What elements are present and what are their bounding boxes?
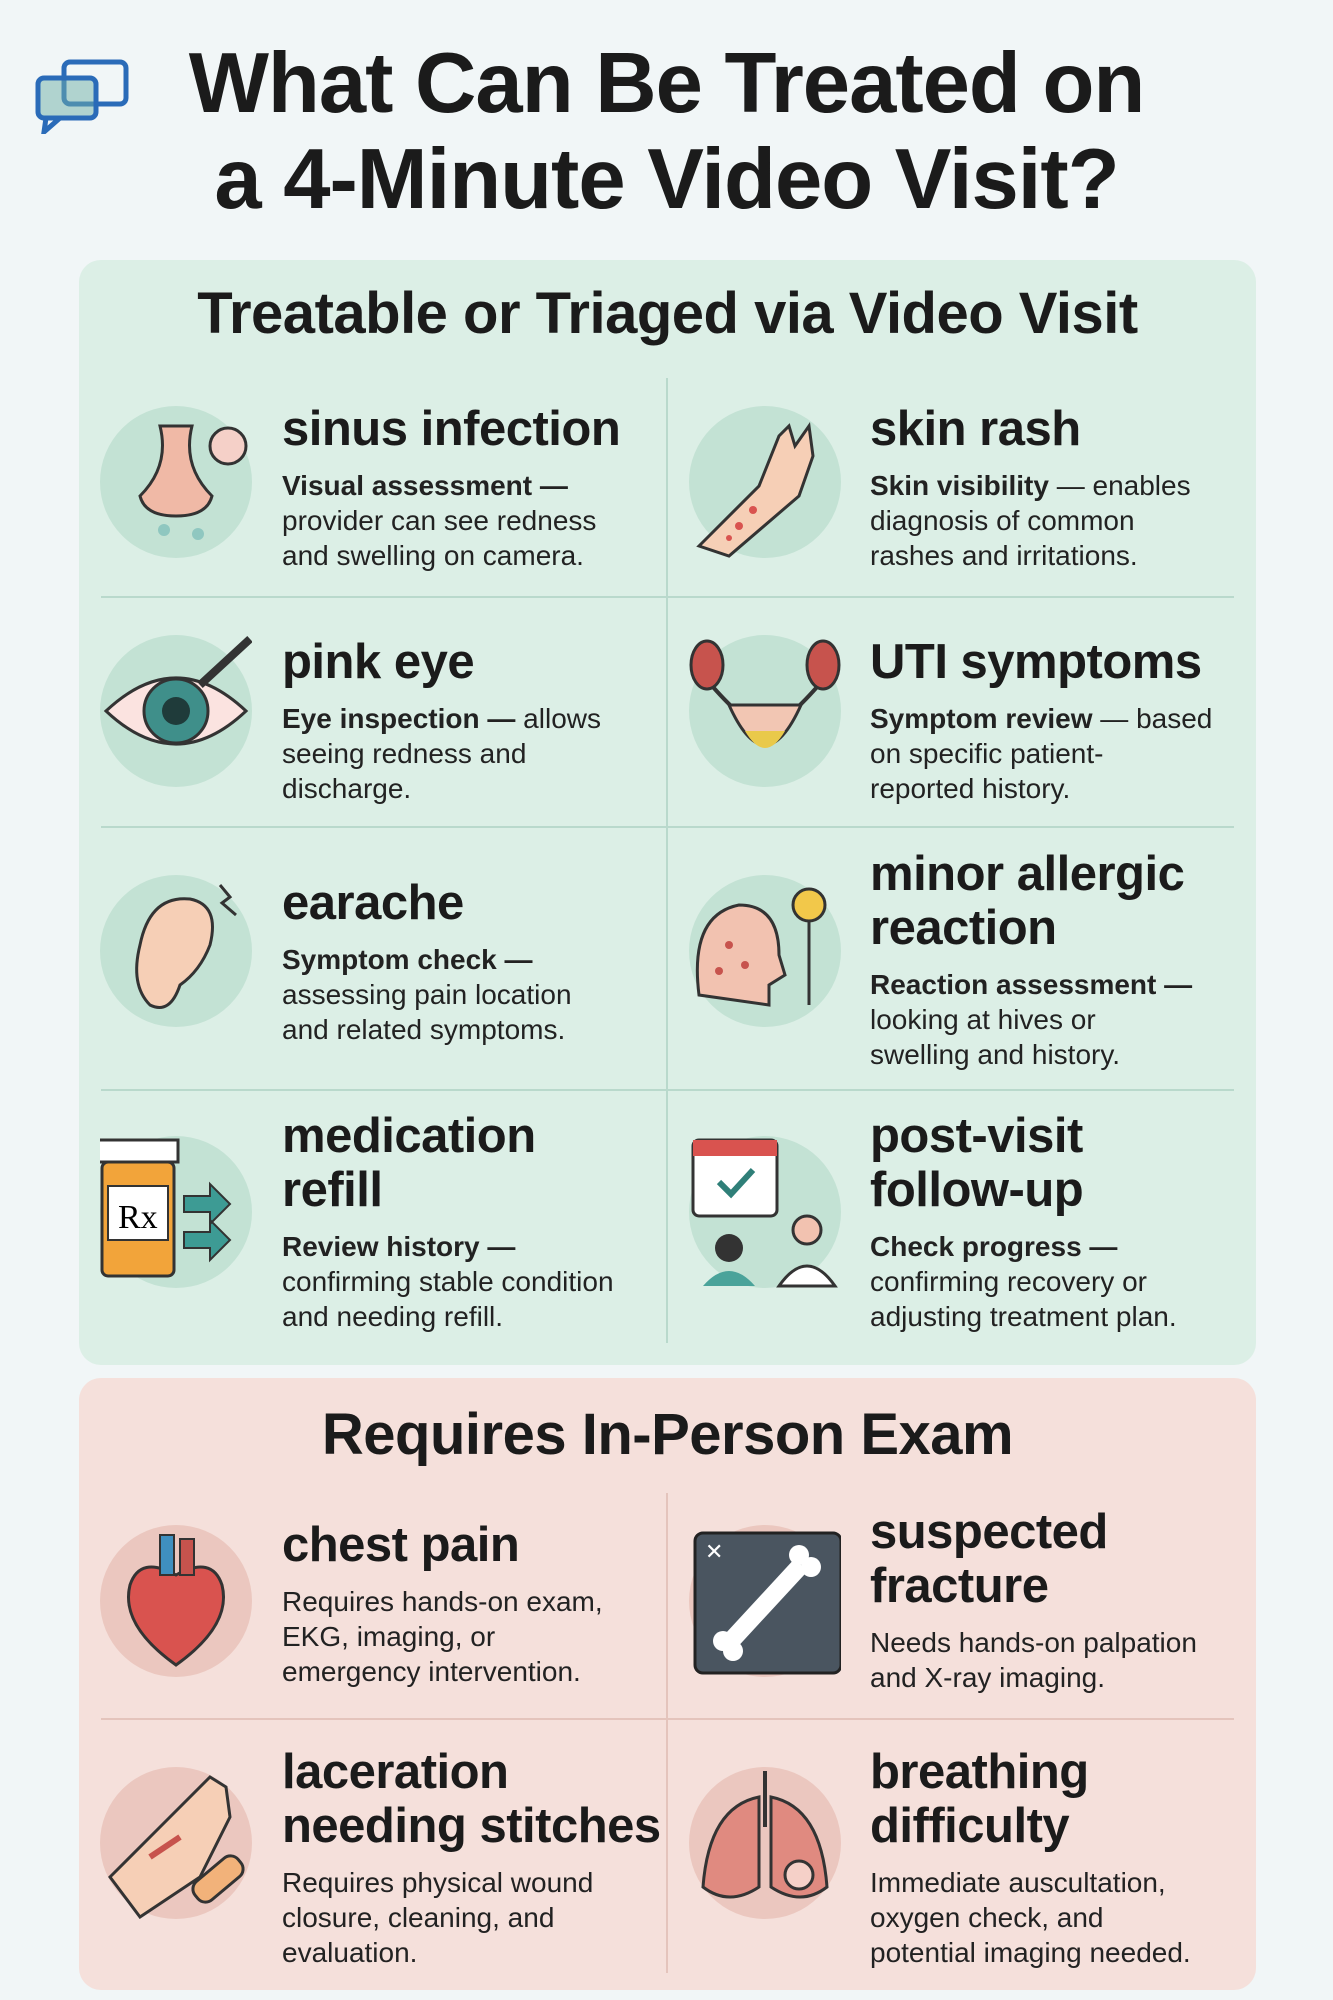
cell: sinus infection: sinus infection xyxy=(282,402,620,456)
cell: medication refill xyxy=(282,1109,614,1332)
cell: UTI symptoms: UTI symptoms xyxy=(870,635,1202,689)
icon: fracture xyxy=(689,1525,841,1677)
cell: pink eye: seeing redness and xyxy=(282,738,526,769)
cell: earache: and related symptoms. xyxy=(282,1014,565,1045)
icon: allergic reaction xyxy=(689,875,841,1027)
heading: in-person: Requires In-Person Exam xyxy=(322,1402,1013,1467)
cell: UTI symptoms: reported history. xyxy=(870,773,1070,804)
cell: earache: assessing pain location xyxy=(282,979,572,1010)
cell: laceration: Requires physical wound xyxy=(282,1867,593,1898)
cell: earache: Symptom check — xyxy=(282,944,533,975)
title xyxy=(188,36,1144,227)
cell: laceration: laceration xyxy=(282,1745,508,1799)
cell: skin rash: rashes and irritations. xyxy=(870,540,1138,571)
cell: UTI symptoms xyxy=(870,635,1212,804)
cell: breathing difficulty: Immediate auscultation, xyxy=(870,1867,1166,1898)
cell: suspected fracture: Needs hands-on palpation xyxy=(870,1627,1197,1658)
cell: sinus infection: and swelling on camera. xyxy=(282,540,584,571)
cell: laceration: needing stitches xyxy=(282,1799,661,1853)
icon: nose xyxy=(100,406,252,558)
cell: post-visit follow-up: follow-up xyxy=(870,1163,1083,1217)
icon: eye xyxy=(100,635,252,787)
cell: suspected fracture: suspected xyxy=(870,1505,1108,1559)
cell: chest pain: EKG, imaging, or xyxy=(282,1621,495,1652)
icon: lungs xyxy=(689,1767,841,1919)
panel: treatable xyxy=(79,260,1256,1365)
cell: sinus infection: Visual assessment — xyxy=(282,470,568,501)
cell: pink eye: pink eye xyxy=(282,635,474,689)
cell: UTI symptoms: Symptom review — based xyxy=(870,703,1212,734)
cell: breathing difficulty xyxy=(870,1745,1191,1968)
cell: minor allergic reaction xyxy=(870,847,1192,1070)
cell: chest pain: emergency intervention. xyxy=(282,1656,581,1687)
cell: chest pain: Requires hands-on exam, xyxy=(282,1586,603,1617)
cell: pink eye: discharge. xyxy=(282,773,411,804)
cell: medication refill: confirming stable condition xyxy=(282,1266,614,1297)
icon: urinary xyxy=(689,635,841,787)
cell: sinus infection xyxy=(282,402,620,571)
cell: breathing difficulty: potential imaging needed. xyxy=(870,1937,1191,1968)
cell: skin rash: skin rash xyxy=(870,402,1081,456)
icon: laceration xyxy=(100,1767,252,1919)
cell: earache: earache xyxy=(282,876,464,930)
cell: minor allergic reaction: minor allergic xyxy=(870,847,1184,901)
cell: minor allergic reaction: looking at hives or xyxy=(870,1004,1096,1035)
cell: post-visit follow-up xyxy=(870,1109,1177,1332)
cell: medication refill: Review history — xyxy=(282,1231,515,1262)
panel: in-person xyxy=(79,1378,1256,1990)
icon: ear xyxy=(100,875,252,1027)
title: What Can Be Treated on xyxy=(189,36,1144,131)
cell: post-visit follow-up: Check progress — xyxy=(870,1231,1117,1262)
cell: chest pain xyxy=(282,1518,603,1687)
cell: suspected fracture: fracture xyxy=(870,1559,1048,1613)
cell: pink eye xyxy=(282,635,601,804)
cell: earache xyxy=(282,876,572,1045)
cell: post-visit follow-up: confirming recovery or xyxy=(870,1266,1147,1297)
cell: medication refill: medication xyxy=(282,1109,536,1163)
cell: laceration: evaluation. xyxy=(282,1937,417,1968)
icon: fracture: ✕ xyxy=(705,1539,723,1564)
cell: suspected fracture: and X-ray imaging. xyxy=(870,1662,1105,1693)
icon: skin rash xyxy=(689,406,841,558)
title: a 4-Minute Video Visit? xyxy=(214,132,1119,227)
cell: breathing difficulty: breathing xyxy=(870,1745,1089,1799)
cell: skin rash: diagnosis of common xyxy=(870,505,1135,536)
cell: laceration xyxy=(282,1745,661,1968)
cell: skin rash xyxy=(870,402,1191,571)
cell: UTI symptoms: on specific patient- xyxy=(870,738,1103,769)
cell: minor allergic reaction: Reaction assessment — xyxy=(870,969,1192,1000)
cell: breathing difficulty: difficulty xyxy=(870,1799,1069,1853)
cell: minor allergic reaction: reaction xyxy=(870,901,1057,955)
icon: medication bottle xyxy=(100,1136,252,1288)
cell: pink eye: Eye inspection — allows xyxy=(282,703,601,734)
cell: breathing difficulty: oxygen check, and xyxy=(870,1902,1104,1933)
cell: post-visit follow-up: adjusting treatment plan. xyxy=(870,1301,1177,1332)
cell: sinus infection: provider can see redness xyxy=(282,505,596,536)
icon: chat bubbles xyxy=(36,60,128,134)
heading: treatable: Treatable or Triaged via Video Visit xyxy=(197,281,1138,346)
icon: heart xyxy=(100,1525,252,1677)
cell: post-visit follow-up: post-visit xyxy=(870,1109,1083,1163)
cell: medication refill: refill xyxy=(282,1163,382,1217)
cell: medication refill: and needing refill. xyxy=(282,1301,503,1332)
cell: minor allergic reaction: swelling and history. xyxy=(870,1039,1120,1070)
cell: chest pain: chest pain xyxy=(282,1518,519,1572)
icon: medication bottle: Rx xyxy=(118,1199,158,1236)
cell: laceration: closure, cleaning, and xyxy=(282,1902,554,1933)
cell: suspected fracture xyxy=(870,1505,1197,1693)
icon: follow-up xyxy=(689,1136,841,1288)
cell: skin rash: Skin visibility — enables xyxy=(870,470,1191,501)
